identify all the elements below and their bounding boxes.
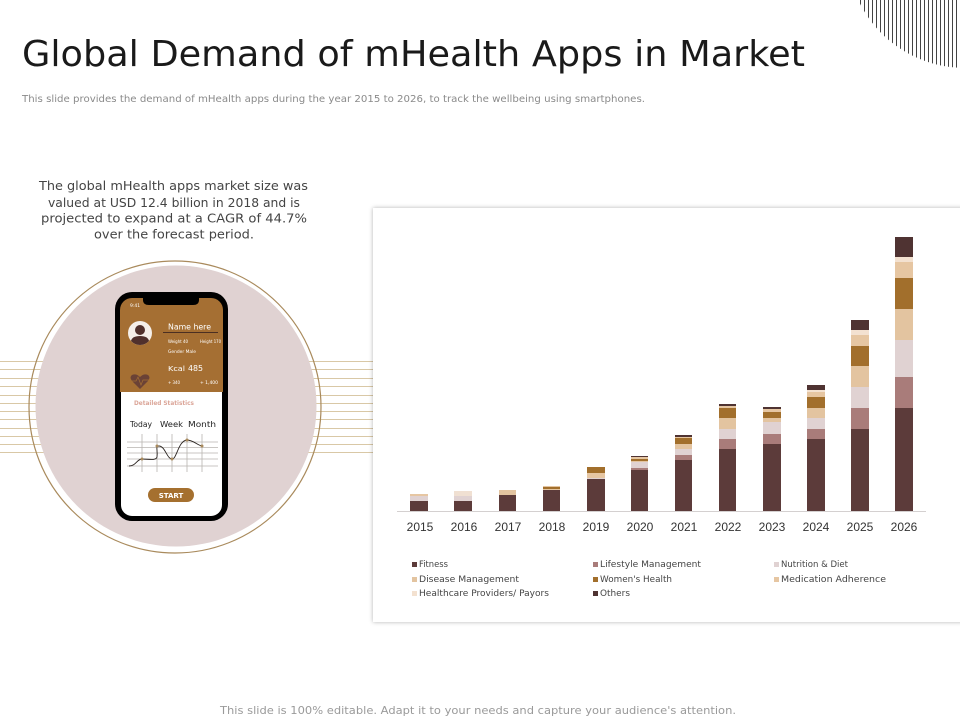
horizontal decorative lines	[0, 362, 373, 452]
detailed statistics label: Detailed Statistics	[134, 399, 194, 407]
profile details: Height 170	[200, 339, 221, 344]
profile details: Gender Male	[168, 349, 197, 354]
phone notch	[143, 298, 199, 305]
x axis year labels: 2019	[583, 520, 610, 534]
market size description	[38, 179, 308, 242]
bar 2017	[499, 490, 516, 511]
status bar: 9:41	[130, 303, 140, 309]
bar 2022	[719, 404, 736, 511]
start button: START	[159, 492, 183, 500]
footer note: This slide is 100% editable. Adapt it to your needs and capture your audience's attention.	[219, 704, 736, 717]
time range tabs: Week	[160, 420, 183, 429]
bar 2021	[675, 435, 692, 511]
legend: Nutrition & Diet	[781, 560, 849, 570]
market size description: over the forecast period.	[94, 228, 254, 242]
phone body	[115, 292, 228, 521]
bar 2015	[410, 494, 428, 511]
x axis year labels: 2025	[847, 520, 874, 534]
legend: Lifestyle Management	[600, 560, 702, 570]
profile details: Weight 40	[168, 339, 188, 344]
time range tabs: Month	[188, 420, 216, 429]
panel: stacked bar chart	[373, 208, 960, 622]
bar 2026	[895, 237, 913, 511]
bar 2016	[454, 491, 472, 511]
subtitle: This slide provides the demand of mHealth apps during the year 2015 to 2026, to track the wellbeing using smartphones.	[21, 94, 645, 105]
heart icon	[130, 374, 150, 389]
profile details: Name here	[168, 322, 211, 332]
start button	[148, 488, 194, 502]
legend: Disease Management	[419, 575, 520, 585]
x axis year labels: 2023	[759, 520, 786, 534]
profile details: Kcal	[168, 365, 185, 373]
legend: Medication Adherence	[781, 575, 886, 585]
bar 2018	[543, 486, 560, 511]
legend: Fitness	[419, 560, 449, 570]
profile details: + 340	[168, 380, 180, 385]
x axis year labels: 2022	[715, 520, 742, 534]
legend: Women's Health	[600, 575, 672, 585]
profile details: + 1,400	[200, 380, 219, 385]
legend: Others	[600, 589, 631, 599]
phone illustration with circle backdrop	[29, 261, 321, 553]
bar 2023	[763, 407, 781, 511]
time range tabs	[129, 420, 216, 429]
time range tabs: Today	[129, 420, 152, 429]
x axis year labels: 2020	[627, 520, 654, 534]
x axis year labels: 2018	[539, 520, 566, 534]
chart axis	[397, 511, 926, 512]
bar 2019	[587, 467, 605, 511]
market size description: projected to expand at a CAGR of 44.7%	[41, 212, 307, 226]
bar 2024	[807, 385, 825, 511]
legend: Healthcare Providers/ Payors	[419, 589, 550, 599]
profile details	[163, 322, 221, 385]
line chart	[127, 434, 218, 472]
phone header panel	[120, 298, 223, 392]
bars	[410, 237, 913, 511]
legend	[412, 560, 886, 599]
bar 2020	[631, 456, 648, 511]
bar 2025	[851, 320, 869, 511]
x axis year labels	[407, 520, 918, 534]
x axis year labels: 2017	[495, 520, 522, 534]
circle backdrop	[29, 261, 321, 553]
x axis year labels: 2015	[407, 520, 434, 534]
x axis year labels: 2021	[671, 520, 698, 534]
title: Global Demand of mHealth Apps in Market	[22, 34, 805, 75]
profile details: 485	[188, 364, 203, 373]
decorative striped arc	[860, 0, 956, 70]
market size description: The global mHealth apps market size was	[38, 179, 308, 193]
x axis year labels: 2026	[891, 520, 918, 534]
x axis year labels: 2016	[451, 520, 478, 534]
market size description: valued at USD 12.4 billion in 2018 and is	[48, 196, 300, 210]
profile avatar	[128, 321, 152, 345]
x axis year labels: 2024	[803, 520, 830, 534]
